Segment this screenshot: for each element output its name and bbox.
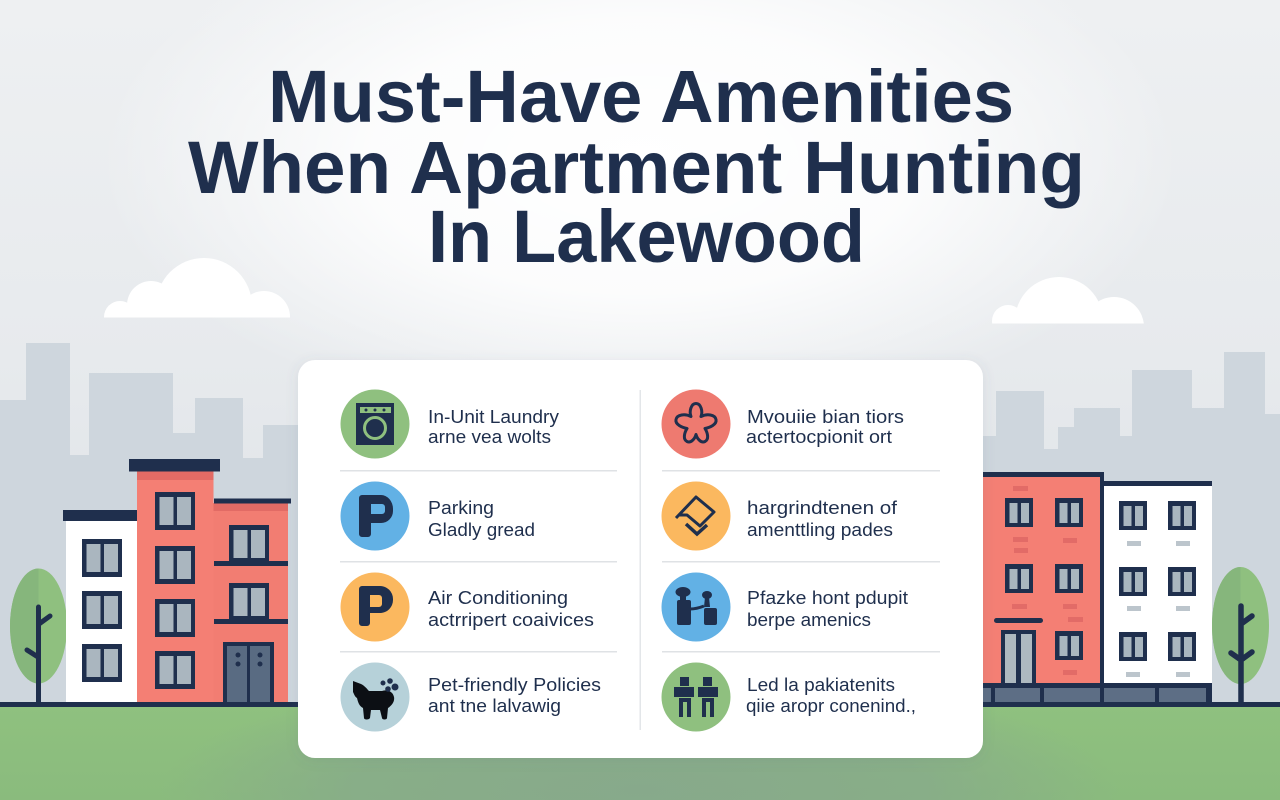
- icon: diamonds: [662, 482, 730, 550]
- label: [747, 498, 898, 540]
- icon: washing machine: [340, 390, 410, 458]
- label: Pfazke hont pdupit: [747, 588, 908, 608]
- icon: parking blue: [340, 482, 410, 550]
- item: diamond amenity: [662, 482, 898, 550]
- label: In-Unit Laundry: [428, 407, 559, 427]
- red side building: [213, 498, 291, 702]
- label: Gladly gread: [428, 520, 535, 540]
- item: in-unit laundry: [340, 390, 559, 458]
- icon: block figures: [662, 662, 730, 732]
- title: In Lakewood: [428, 195, 865, 278]
- label: [746, 675, 916, 716]
- panel: amenities card: [298, 360, 983, 758]
- icon: flower: [662, 390, 730, 458]
- title: [188, 55, 1085, 278]
- skyline silhouette: [0, 343, 1280, 705]
- white building: [1104, 481, 1212, 684]
- label: [428, 407, 559, 447]
- buildings right: [983, 472, 1212, 704]
- label: [428, 675, 601, 716]
- title: Must-Have Amenities: [268, 55, 1014, 138]
- label: ant tne lalvawig: [428, 696, 561, 716]
- label: [428, 588, 594, 630]
- label: qiie aropr conenind.,: [746, 696, 916, 716]
- cloud right: [992, 277, 1144, 324]
- item: block figures amenity: [662, 662, 916, 732]
- cloud left: [104, 258, 290, 318]
- label: Led la pakiatenits: [747, 675, 895, 695]
- title: When Apartment Hunting: [188, 126, 1085, 209]
- door: [223, 642, 274, 702]
- label: [747, 588, 908, 630]
- label: berpe amenics: [747, 610, 871, 630]
- item: people amenity: [662, 572, 908, 642]
- label: [746, 407, 904, 447]
- item: flower amenity: [662, 390, 904, 458]
- building base: [983, 683, 1212, 704]
- item: pet-friendly: [340, 662, 601, 732]
- icon: pet: [340, 662, 410, 732]
- label: amenttling pades: [747, 520, 893, 540]
- item: parking: [340, 482, 535, 550]
- item: air conditioning: [340, 572, 594, 642]
- label: Mvouiie bian tiors: [747, 407, 904, 427]
- label: Pet-friendly Policies: [428, 675, 601, 695]
- buildings left: [63, 459, 291, 702]
- label: Parking: [428, 498, 494, 518]
- label: Air Conditioning: [428, 588, 568, 608]
- label: arne vea wolts: [428, 427, 551, 447]
- tree left: [10, 568, 67, 704]
- icon: people: [662, 572, 730, 642]
- red tall building: [129, 459, 220, 702]
- label: actertocpionit ort: [746, 427, 892, 447]
- label: hargrindtenen of: [747, 498, 898, 518]
- entrance: [1001, 630, 1036, 684]
- icon: parking orange: [340, 572, 410, 642]
- tree right: [1212, 567, 1269, 704]
- label: [428, 498, 535, 540]
- label: actrripert coaivices: [428, 610, 594, 630]
- ground: [0, 702, 1280, 800]
- white building: [63, 510, 138, 702]
- red building: [983, 472, 1104, 684]
